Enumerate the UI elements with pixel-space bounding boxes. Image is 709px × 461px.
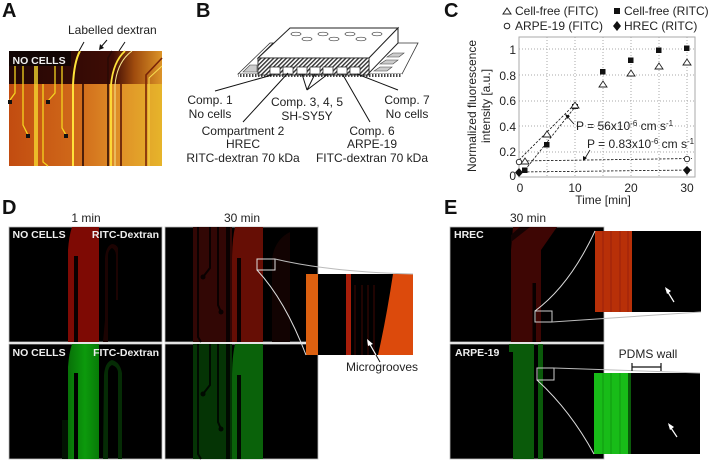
labels and leader lines of panel B: No cells — [386, 107, 428, 121]
panel E: HREC image: HREC — [454, 229, 484, 241]
microgrooves label: Microgrooves — [346, 360, 418, 374]
time heading 30 min: 30 min — [224, 211, 260, 225]
labels and leader lines of panel B: HREC — [226, 137, 260, 151]
legend: HREC (RITC) — [624, 19, 697, 33]
scatter chart: normalized fluorescence intensity: -1 — [687, 137, 695, 146]
scatter chart: normalized fluorescence intensity: intensity [a.u.] — [479, 69, 493, 143]
scatter chart: normalized fluorescence intensity: cm s — [658, 137, 687, 151]
labels and leader lines of panel B: FITC-dextran 70 kDa — [316, 151, 428, 165]
scatter chart: normalized fluorescence intensity: P = 0.83x10 — [587, 137, 651, 151]
labels and leader lines of panel B: Comp. 1 — [187, 93, 233, 107]
scatter chart: normalized fluorescence intensity: 0.8 — [499, 69, 516, 83]
scatter chart: normalized fluorescence intensity: 20 — [624, 181, 638, 195]
panel E: ARPE-19 image: ARPE-19 — [455, 347, 500, 359]
panel D: FITC 30 min image — [165, 344, 318, 459]
label: labelled dextran with arrows: Labelled dextran — [68, 23, 157, 37]
scatter chart: normalized fluorescence intensity: -1 — [666, 119, 674, 128]
scatter chart: normalized fluorescence intensity: -6 — [651, 137, 659, 146]
panel A: no-cells device photo: NO CELLS — [12, 55, 66, 67]
scatter chart: normalized fluorescence intensity: 0.6 — [499, 94, 516, 108]
scatter chart: normalized fluorescence intensity: Time [min] — [575, 193, 631, 207]
scatter chart: normalized fluorescence intensity: 0.2 — [499, 145, 516, 159]
scatter chart: normalized fluorescence intensity: -6 — [630, 119, 638, 128]
time heading 1 min: 1 min — [71, 211, 101, 225]
panel E: HREC image — [450, 227, 604, 342]
scatter chart: normalized fluorescence intensity: 30 — [680, 181, 694, 195]
scatter chart: normalized fluorescence intensity: 0 — [517, 181, 524, 195]
panel D: RITC 1 min image: RITC-Dextran — [92, 229, 159, 241]
labels and leader lines of panel B: Comp. 7 — [384, 93, 430, 107]
scatter chart: normalized fluorescence intensity — [465, 37, 695, 207]
legend: Cell-free (RITC) — [624, 4, 709, 18]
panel D: RITC 30 min image — [165, 227, 318, 342]
panel D: RITC 1 min image — [9, 227, 162, 342]
labels and leader lines of panel B: No cells — [189, 107, 231, 121]
panel D: FITC 1 min image — [9, 344, 162, 459]
PDMS wall label with bracket — [619, 347, 677, 371]
panel letter A: A — [2, 0, 16, 22]
scatter chart: normalized fluorescence intensity: cm s — [637, 119, 666, 133]
panel B: chip schematic — [238, 28, 418, 77]
panel letter C: C — [444, 0, 458, 22]
labels and leader lines of panel B: Comp. 3, 4, 5 — [271, 95, 343, 109]
legend — [503, 4, 709, 33]
labels and leader lines of panel B: Comp. 6 — [349, 124, 395, 138]
panel A: no-cells device photo — [8, 51, 162, 166]
panel D: FITC 1 min image: FITC-Dextran — [93, 347, 159, 359]
labels and leader lines of panel B: Compartment 2 — [202, 124, 285, 138]
panel letter B: B — [196, 0, 210, 22]
labels and leader lines of panel B: ARPE-19 — [347, 137, 397, 151]
panel D: RITC 1 min image: NO CELLS — [12, 229, 66, 241]
scatter chart: normalized fluorescence intensity: 0 — [509, 169, 516, 183]
panel E: ARPE-19 zoom inset — [594, 373, 700, 454]
zoom callout lines in panel D — [257, 259, 413, 355]
scatter chart: normalized fluorescence intensity: P = 56x10 — [576, 119, 630, 133]
panel D: zoom inset with microgrooves — [306, 274, 413, 355]
legend: ARPE-19 (FITC) — [515, 19, 603, 33]
scatter chart: normalized fluorescence intensity: 10 — [568, 181, 582, 195]
labels and leader lines of panel B: RITC-dextran 70 kDa — [186, 151, 300, 165]
scatter chart: normalized fluorescence intensity: 0.4 — [499, 120, 516, 134]
zoom callout lines in panel E — [535, 231, 701, 454]
panel E: HREC zoom inset — [595, 231, 701, 312]
panel D: FITC 1 min image: NO CELLS — [12, 347, 66, 359]
labels and leader lines of panel B — [186, 73, 430, 165]
PDMS wall label with bracket: PDMS wall — [619, 347, 677, 361]
label: labelled dextran with arrows — [68, 23, 157, 51]
scatter chart: normalized fluorescence intensity: 1 — [509, 43, 516, 57]
labels and leader lines of panel B: SH-SY5Y — [281, 109, 333, 123]
panel letter E: E — [444, 197, 457, 219]
scatter chart: normalized fluorescence intensity: Normalized fluorescence — [465, 40, 479, 172]
panel letter D: D — [2, 197, 16, 219]
time heading 30 min panel E: 30 min — [510, 211, 546, 225]
legend: Cell-free (FITC) — [515, 4, 598, 18]
panel E: ARPE-19 image — [450, 344, 604, 459]
